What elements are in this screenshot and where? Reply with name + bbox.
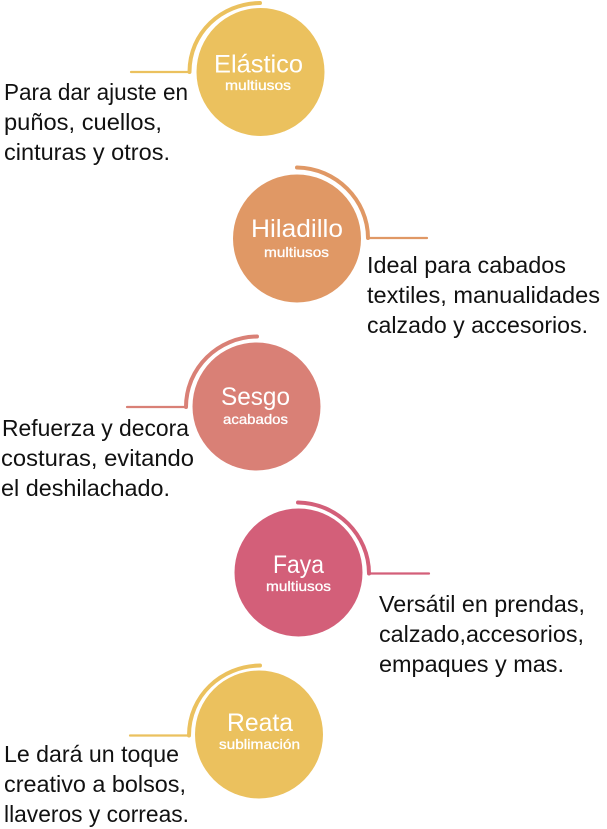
description: Hiladillo [367, 252, 600, 338]
description: Sesgo: Refuerza y decora [2, 415, 189, 441]
circle: Faya [234, 508, 362, 636]
description: Elástico [4, 79, 188, 165]
connector arc and line: Faya [298, 502, 429, 574]
description: Faya: Versátil en prendas, [379, 591, 585, 617]
heading: Elástico: Elástico [214, 50, 303, 78]
description: Hiladillo: textiles, manualidades [367, 282, 600, 308]
description: Faya: empaques y mas. [379, 651, 564, 677]
subheading: multiusos: multiusos [225, 77, 291, 93]
description: Sesgo: el deshilachado. [1, 475, 170, 501]
heading: Hiladillo: Hiladillo [251, 215, 343, 243]
panel: Elástico [4, 3, 324, 165]
connector arc and line: Sesgo [127, 336, 257, 407]
subheading: acabados: acabados [223, 411, 288, 427]
description: Hiladillo: Ideal para cabados [367, 252, 566, 278]
heading: Reata: Reata [227, 709, 293, 737]
panel: Hiladillo [233, 168, 600, 338]
description: Hiladillo: calzado y accesorios. [367, 312, 588, 338]
circle: Elástico [196, 8, 324, 136]
subheading: sublimación: sublimación [219, 736, 300, 752]
description: Reata: Le dará un toque [4, 741, 179, 767]
circle: Hiladillo [233, 174, 361, 302]
panel: Faya [234, 502, 585, 677]
circle: Sesgo [192, 342, 320, 470]
description: Sesgo [1, 415, 194, 501]
description: Elástico: puños, cuellos, [4, 109, 162, 135]
panel: Sesgo [1, 336, 320, 501]
connector arc and line: Reata [130, 666, 260, 736]
description: Elástico: cinturas y otros. [4, 139, 170, 165]
circle: Reata [195, 670, 323, 798]
connector arc and line: Hiladillo [297, 168, 427, 238]
connector arc and line: Elástico [131, 3, 260, 72]
description: Faya [379, 591, 585, 677]
description: Reata: llaveros y correas. [4, 801, 189, 827]
description: Faya: calzado,accesorios, [379, 621, 584, 647]
description: Elástico: Para dar ajuste en [4, 79, 188, 105]
panel: Reata [4, 666, 323, 827]
subheading: multiusos: multiusos [266, 578, 331, 594]
description: Reata [4, 741, 189, 827]
description: Reata: creativo a bolsos, [4, 771, 186, 797]
description: Sesgo: costuras, evitando [1, 445, 194, 471]
heading: Sesgo: Sesgo [221, 383, 290, 411]
heading: Faya: Faya [273, 551, 324, 579]
subheading: multiusos: multiusos [264, 244, 329, 260]
